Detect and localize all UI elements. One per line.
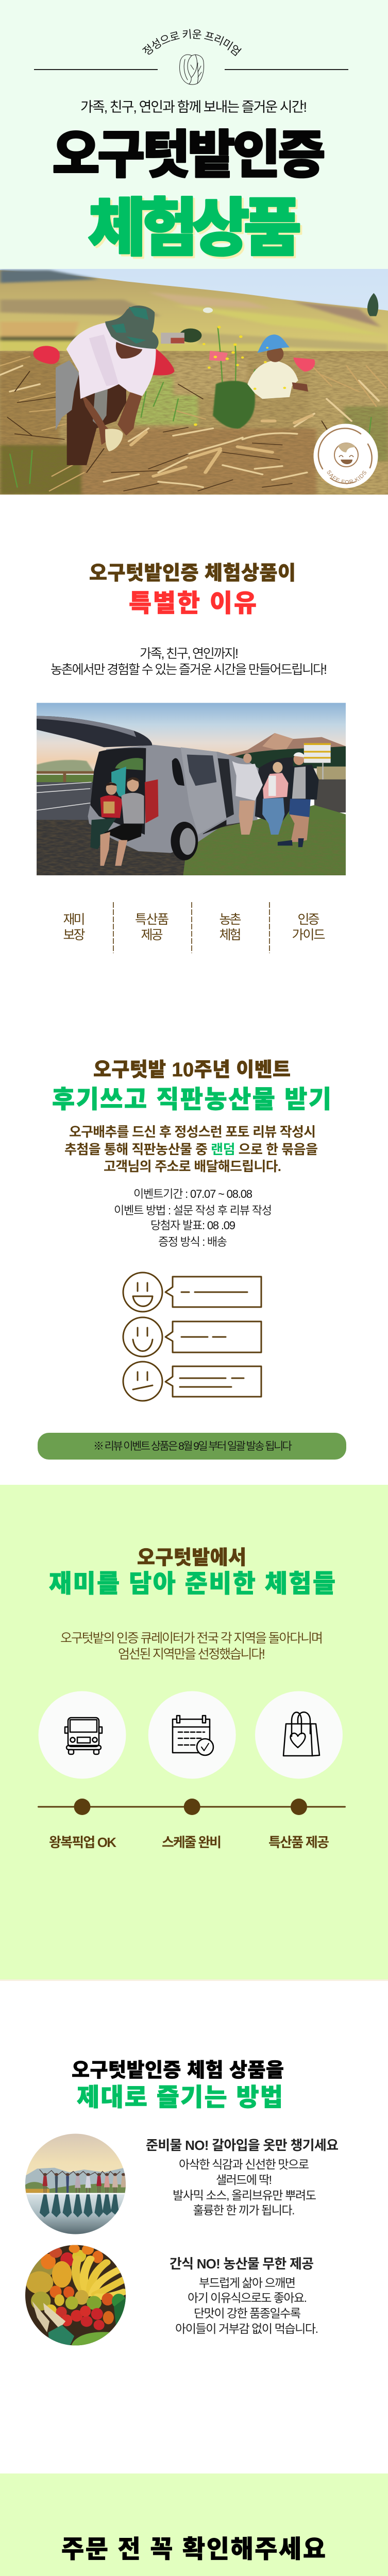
left rule — [34, 69, 158, 70]
text: second tip — [170, 2256, 318, 2335]
feature list: 특산품 — [135, 912, 169, 927]
labels: 스케줄 완비 — [162, 1835, 222, 1850]
feature list: 가이드 — [292, 928, 326, 942]
feature list: 재미 — [63, 912, 86, 927]
heading: 오구텃밭인증 체험상품이 — [89, 563, 296, 584]
heading: 오구텃밭인증 체험 상품을 — [72, 2060, 284, 2081]
text: first tip: 아삭한 식감과 신선한 맛으로 — [179, 2158, 309, 2171]
text: second tip: 부드럽게 삶아 으깨면 — [199, 2276, 296, 2290]
event details — [114, 1188, 272, 1248]
title green with shadow: 체험상품 — [88, 193, 301, 263]
labels: 왕복픽업 OK — [49, 1835, 116, 1850]
feature list: 제공 — [141, 928, 163, 942]
heading: 주문 전 꼭 확인해주세요 — [61, 2536, 326, 2563]
labels — [49, 1835, 329, 1850]
panel: 10th anniversary event — [38, 1059, 346, 1460]
icon: bus — [65, 1718, 102, 1754]
text: first tip: 준비물 NO! 갈아입을 옷만 챙기세요 — [146, 2138, 339, 2153]
text: first tip: 샐러드에 딱! — [216, 2173, 272, 2187]
subtitle: 가족, 친구, 연인과 함께 보내는 즐거운 시간! — [80, 99, 307, 115]
feature list: 인증 — [298, 912, 319, 927]
text: second tip: 단맛이 강한 품종일수록 — [194, 2307, 301, 2320]
feature list: 체험 — [220, 928, 241, 942]
description: 오구텃밭의 인증 큐레이터가 전국 각 지역을 돌아다니며 — [60, 1631, 323, 1646]
right rule — [225, 69, 348, 70]
text: first tip: 발사믹 소스, 올리브유만 뿌려도 — [173, 2189, 316, 2202]
description: 엄선된 지역만을 선정했습니다! — [118, 1647, 265, 1662]
photo: fruits and vegetables — [25, 2245, 126, 2345]
panel: check before ordering — [0, 2473, 388, 2576]
feature list: 농촌 — [220, 912, 241, 927]
event description: 고객님의 주소로 배달해드립니다. — [104, 1159, 281, 1174]
event details: 이벤트 방법 : 설문 작성 후 리뷰 작성 — [114, 1204, 272, 1217]
text: second tip: 아이들이 거부감 없이 먹습니다. — [175, 2322, 318, 2335]
event details: 당첨자 발표: 08 .09 — [150, 1219, 235, 1232]
panel: hero header — [0, 0, 388, 269]
icon: calendar — [173, 1716, 213, 1755]
icon: cabbage — [180, 55, 204, 84]
event description: 오구배추를 드신 후 정성스런 포토 리뷰 작성시 — [69, 1124, 316, 1140]
intro text: 농촌에서만 경험할 수 있는 즐거운 시간을 만들어드립니다! — [50, 663, 327, 677]
heading: 오구텃밭 10주년 이벤트 — [93, 1059, 291, 1081]
green heading: 재미를 담아 준비한 체험들 — [49, 1570, 335, 1598]
green heading: 후기쓰고 직판농산물 받기 — [52, 1086, 331, 1113]
event details: 이벤트기간 : 07.07 ~ 08.08 — [133, 1188, 252, 1200]
text: second tip: 아기 이유식으로도 좋아요. — [188, 2291, 307, 2304]
panel: how to enjoy — [25, 2060, 339, 2345]
notice pill: ※ 리뷰 이벤트 상품은 8월 9일 부터 일괄 발송 됩니다 — [93, 1440, 292, 1452]
title green with shadow: 체험상품 — [90, 195, 303, 265]
event description: 추첨을 통해 직판농산물 중 랜덤 으로 한 묶음을 — [64, 1142, 318, 1157]
green heading: 제대로 즐기는 방법 — [77, 2084, 283, 2111]
photo: family and van — [37, 703, 346, 875]
heading: 오구텃밭에서 — [137, 1547, 246, 1569]
icon: review faces — [123, 1273, 261, 1401]
icon: safe for kids badge: SAFE FOR KIDS — [327, 470, 366, 484]
feature list: 보장 — [63, 928, 86, 942]
intro text — [50, 647, 327, 677]
notice pill — [38, 1433, 346, 1460]
intro text: 가족, 친구, 연인까지! — [140, 647, 239, 661]
red heading: 특별한 이유 — [129, 590, 257, 617]
icon: safe for kids badge — [313, 423, 378, 488]
title black: 오구텃밭인증 — [53, 126, 326, 184]
photo: people by the water — [22, 2132, 129, 2237]
icon circles — [38, 1691, 343, 1778]
text: first tip — [146, 2138, 339, 2217]
panel: why special — [37, 563, 346, 953]
feature list — [63, 902, 326, 953]
timeline — [38, 1799, 346, 1815]
text: second tip: 간식 NO! 농산물 무한 제공 — [170, 2256, 314, 2272]
event details: 증정 방식 : 배송 — [158, 1235, 227, 1248]
photo: farmers harvesting corn — [0, 269, 388, 495]
description — [60, 1631, 323, 1662]
text: first tip: 훌륭한 한 끼가 됩니다. — [193, 2204, 295, 2217]
labels: 특산품 제공 — [268, 1835, 329, 1850]
panel: prepared experiences — [0, 1485, 388, 1981]
icon: shopping bag — [283, 1712, 319, 1756]
event description — [64, 1124, 318, 1174]
arched tagline: 정성으로 키운 프리미엄 — [142, 29, 242, 56]
